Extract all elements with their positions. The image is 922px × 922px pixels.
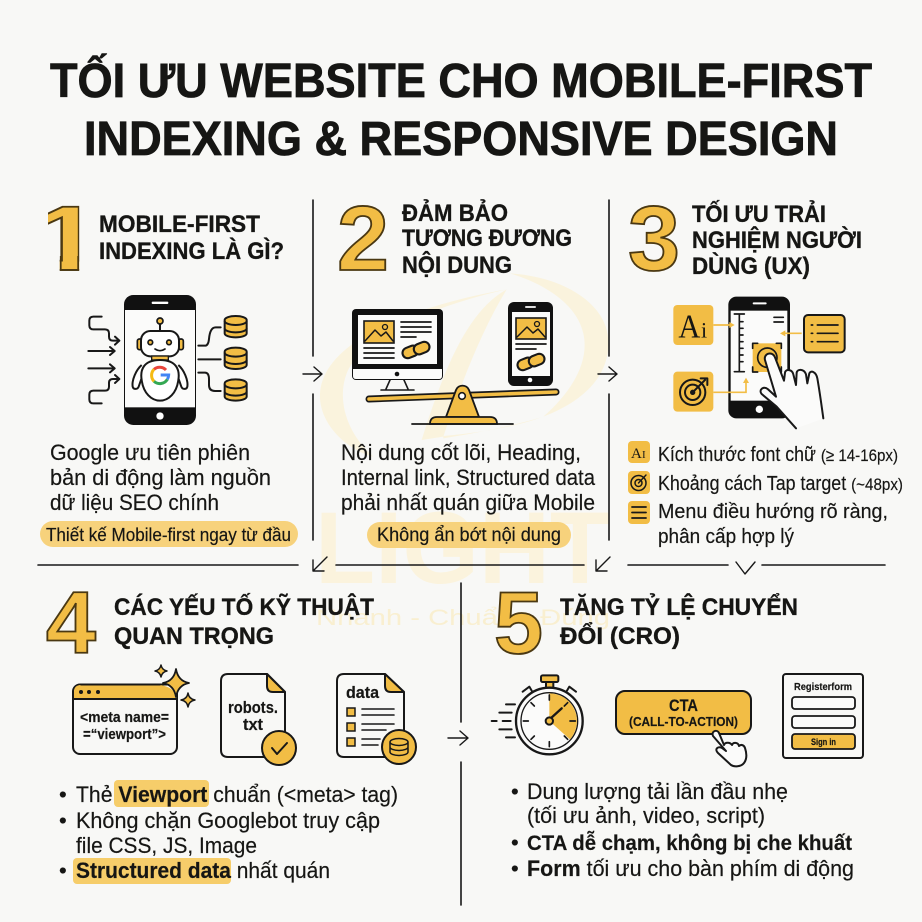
number 1: 1 — [32, 188, 103, 290]
icon: meta viewport browser — [73, 665, 195, 754]
register form: Sign in — [811, 737, 836, 747]
number 1 — [48, 206, 80, 271]
icon: data file — [337, 674, 416, 764]
icon: phone — [508, 302, 553, 386]
register form — [783, 674, 863, 758]
number 5: 5 — [494, 573, 543, 672]
icon: data file: data — [346, 683, 380, 702]
number 2: 2 — [337, 188, 389, 290]
CTA button with hand: CTA — [669, 697, 698, 715]
icon: font size — [628, 441, 650, 463]
bullet list 5 — [511, 779, 854, 881]
icon: robots.txt file: txt — [243, 716, 263, 734]
callout 2: Không ẩn bớt nội dung — [377, 525, 561, 546]
callout 1: Thiết kế Mobile-first ngay từ đầu — [46, 525, 291, 545]
body text 2: Internal link, Structured data — [341, 465, 596, 490]
watermark — [315, 273, 610, 630]
heading 4: CÁC YẾU TỐ KỸ THUẬT — [114, 593, 374, 621]
heading 2: NỘI DUNG — [402, 251, 512, 279]
bullet list 5: • — [511, 779, 519, 804]
body text 1 — [50, 440, 271, 515]
heading 2: ĐẢM BẢO — [402, 198, 508, 227]
body text 2 — [341, 440, 596, 515]
heading 5: TĂNG TỶ LỆ CHUYỂN — [560, 592, 798, 621]
heading 2 — [402, 198, 572, 279]
bullet list 5: • — [511, 830, 519, 855]
title: INDEXING & RESPONSIVE DESIGN — [84, 112, 838, 166]
heading 3: NGHIỆM NGƯỜI — [692, 226, 862, 254]
bullet list 5: CTA dễ chạm, không bị che khuất — [527, 830, 852, 855]
bullet list 5: Form tối ưu cho bàn phím di động — [527, 856, 854, 881]
heading 3 — [692, 199, 862, 280]
dividers and flow arrows — [38, 200, 885, 905]
panel 1: mobile-first indexing — [32, 188, 298, 547]
CTA button with hand: (CALL-TO-ACTION) — [629, 714, 738, 729]
heading 1: MOBILE-FIRST — [99, 211, 260, 238]
number 3: 3 — [628, 188, 680, 290]
title — [50, 53, 872, 166]
icon: font size: A — [631, 446, 642, 462]
feature list: phân cấp hợp lý — [658, 526, 794, 548]
number 4: 4 — [46, 573, 96, 672]
bullet list 4: • — [59, 782, 67, 807]
icon: stopwatch — [492, 675, 583, 754]
bullet list 4: Structured data nhất quán — [76, 858, 330, 883]
icon: robots.txt file: robots. — [228, 699, 278, 717]
icon: phone with robot and databases — [88, 295, 247, 425]
bullet list 5: • — [511, 856, 519, 881]
panel 5: conversion rate — [492, 573, 863, 881]
panel 2: content parity — [337, 188, 596, 548]
body text 1: bản di động làm nguồn — [50, 465, 271, 490]
bullet list 4: • — [59, 808, 67, 833]
body text 2: phải nhất quán giữa Mobile — [341, 490, 595, 515]
feature list: Khoảng cách Tap target (~48px) — [658, 473, 903, 495]
bullet list 4: Thẻ Viewport chuẩn (<meta> tag) — [76, 782, 398, 807]
panel 4: technical factors — [46, 573, 416, 884]
icon: monitor — [352, 309, 443, 390]
heading 1: INDEXING LÀ GÌ? — [99, 237, 284, 265]
register form: Registerform — [794, 681, 852, 693]
feature list: Menu điều hướng rõ ràng, — [658, 501, 888, 523]
bullet list 4: Không chặn Googlebot truy cập — [76, 808, 380, 833]
bullet list 4: file CSS, JS, Image — [76, 833, 257, 858]
feature list: Kích thước font chữ (≥ 14-16px) — [658, 444, 898, 466]
watermark: Nhanh - Chuẩn - Đúng — [316, 605, 610, 630]
Google G — [152, 367, 169, 384]
title: TỐI ƯU WEBSITE CHO MOBILE-FIRST — [50, 53, 872, 108]
icon: balance scale — [369, 386, 556, 424]
panel 3: user experience — [628, 188, 903, 548]
icon: phone with tap target — [673, 297, 845, 428]
bullet list 5: (tối ưu ảnh, video, script) — [527, 803, 765, 828]
heading 3: TỐI ƯU TRẢI — [692, 199, 826, 228]
heading 5 — [560, 592, 798, 650]
watermark: LIGHT — [315, 491, 610, 605]
icon: font size: I — [642, 449, 646, 461]
heading 1 — [99, 211, 284, 265]
CTA button with hand — [616, 691, 751, 766]
icon: robots.txt file — [221, 674, 296, 765]
icon: meta viewport browser: <meta name= — [80, 710, 169, 726]
bullet list 4: • — [59, 858, 67, 883]
icon: phone with tap target: i — [701, 317, 707, 342]
body text 1: dữ liệu SEO chính — [50, 490, 219, 515]
icon: phone with tap target: A — [678, 308, 700, 345]
bullet list 4 — [59, 780, 398, 884]
feature list — [628, 441, 903, 548]
heading 4 — [114, 593, 374, 650]
heading 3: DÙNG (UX) — [692, 252, 810, 280]
body text 2: Nội dung cốt lõi, Heading, — [341, 440, 581, 465]
icon: target — [628, 471, 650, 494]
heading 4: QUAN TRỌNG — [114, 623, 274, 650]
icon: menu — [628, 501, 650, 524]
heading 2: TƯƠNG ĐƯƠNG — [402, 225, 572, 252]
icon: meta viewport browser: =“viewport”> — [83, 727, 166, 743]
body text 1: Google ưu tiên phiên — [50, 440, 250, 465]
heading 5: ĐỔI (CRO) — [560, 622, 680, 650]
bullet list 5: Dung lượng tải lần đầu nhẹ — [527, 779, 788, 804]
